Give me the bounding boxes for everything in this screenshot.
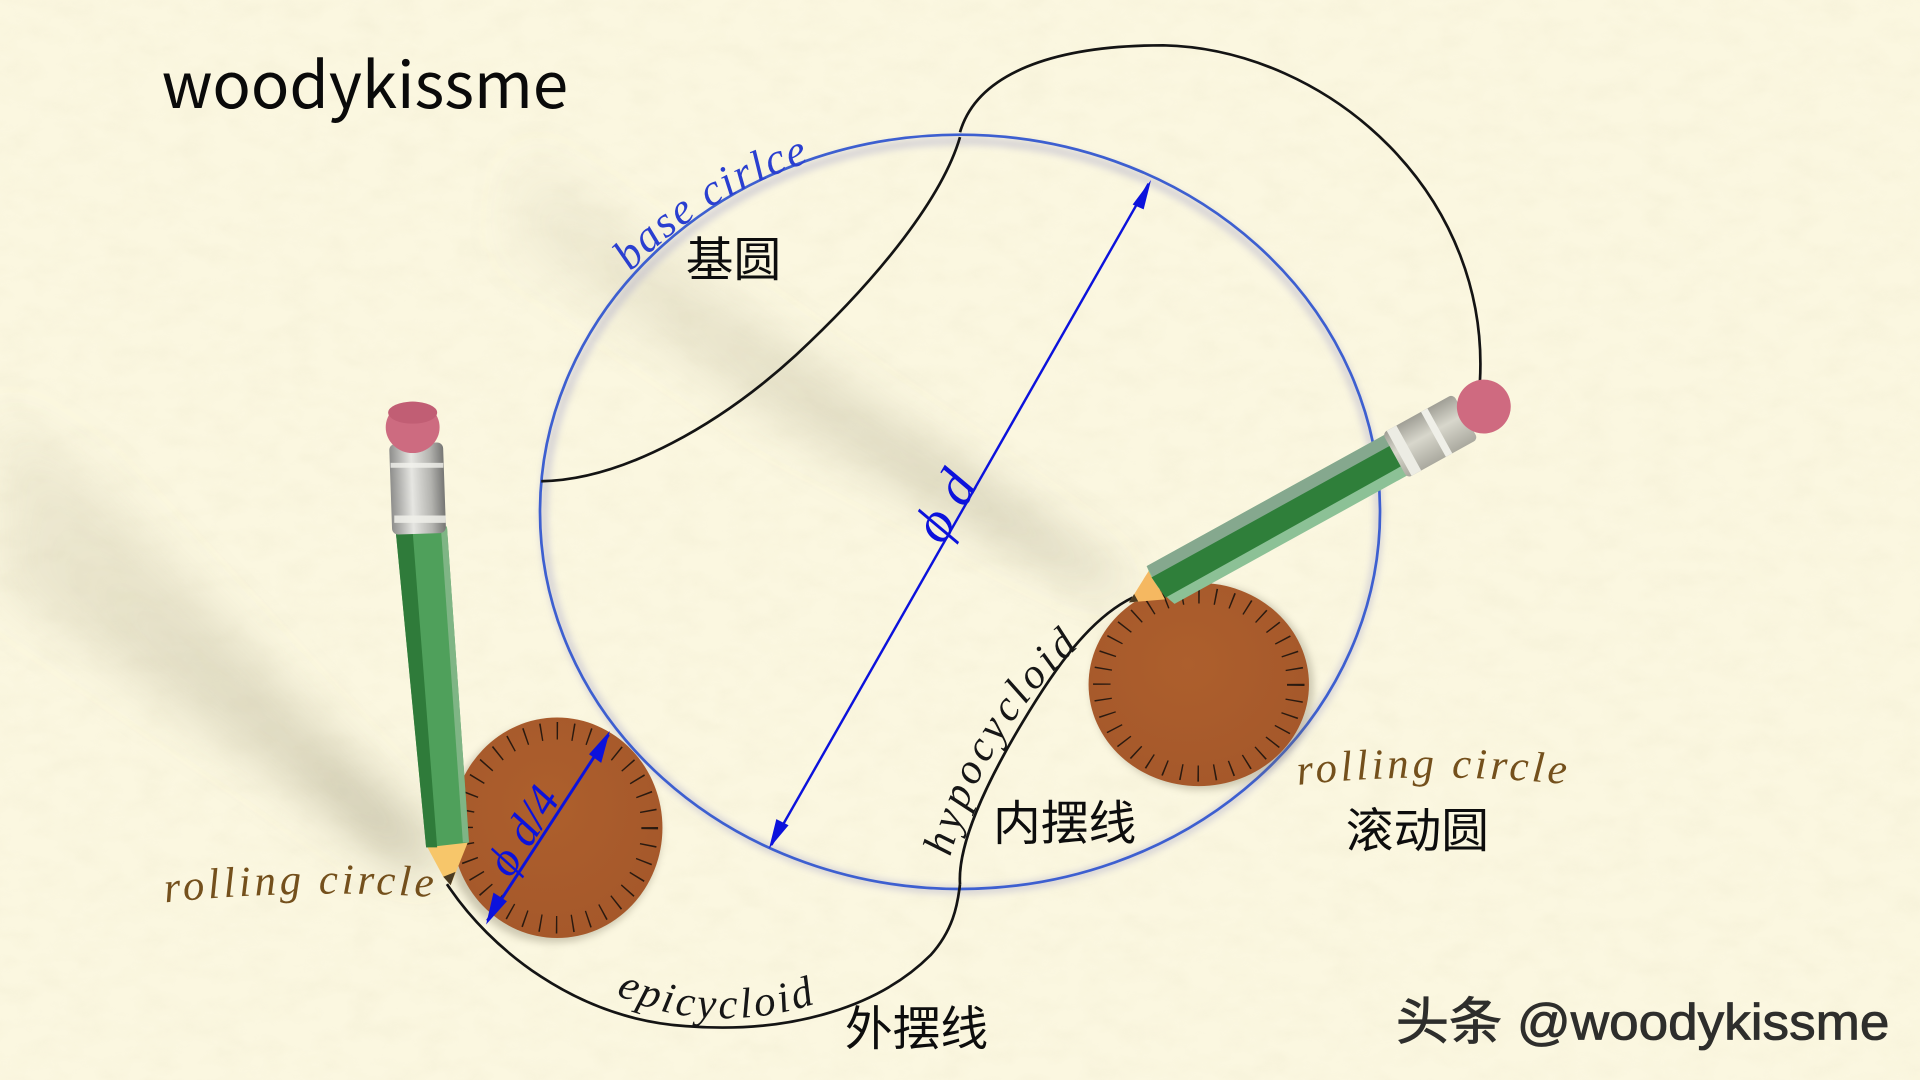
label: rolling circle right: rolling circle bbox=[1298, 750, 1566, 787]
label: base circle Chinese: 基圆 bbox=[686, 235, 781, 288]
dimension arrow: rolling circle diameter bbox=[486, 731, 610, 924]
dimension arrow: base circle diameter bbox=[769, 180, 1151, 849]
label: rolling circle left: rolling circle bbox=[166, 865, 433, 904]
label: hypocycloid: hypocycloid bbox=[922, 625, 1077, 856]
watermark: 头条 @woodykissme bbox=[1396, 993, 1889, 1051]
cast shadows of pencils bbox=[0, 153, 1133, 863]
pencil: right diagonal bbox=[1116, 370, 1520, 626]
curve: epicycloid lower arc bbox=[447, 884, 960, 1028]
curve: hypocycloid lower arc bbox=[960, 598, 1133, 884]
dimension label: phi d/4: ϕ d/4 bbox=[477, 777, 570, 885]
rolling circle: right disc with tick marks bbox=[1089, 583, 1314, 790]
curve: hypocycloid upper arc bbox=[541, 137, 960, 481]
label: epicycloid: epicycloid bbox=[618, 975, 813, 1026]
pencil: left vertical bbox=[386, 402, 469, 885]
title: woodykissme bbox=[162, 35, 568, 127]
base circle bbox=[540, 135, 1380, 889]
rolling circle: left disc with tick marks bbox=[446, 718, 662, 943]
shadow of base circle bbox=[544, 141, 1379, 890]
label: rolling circle Chinese: 滚动圆 bbox=[1346, 805, 1489, 858]
curve: epicycloid upper lobe bbox=[960, 45, 1480, 392]
dimension label: phi d: ϕ d bbox=[900, 459, 990, 553]
label: base circle: base cirlce bbox=[612, 144, 806, 270]
label: hypocycloid Chinese: 内摆线 bbox=[993, 798, 1136, 851]
label: epicycloid Chinese: 外摆线 bbox=[845, 1004, 988, 1057]
